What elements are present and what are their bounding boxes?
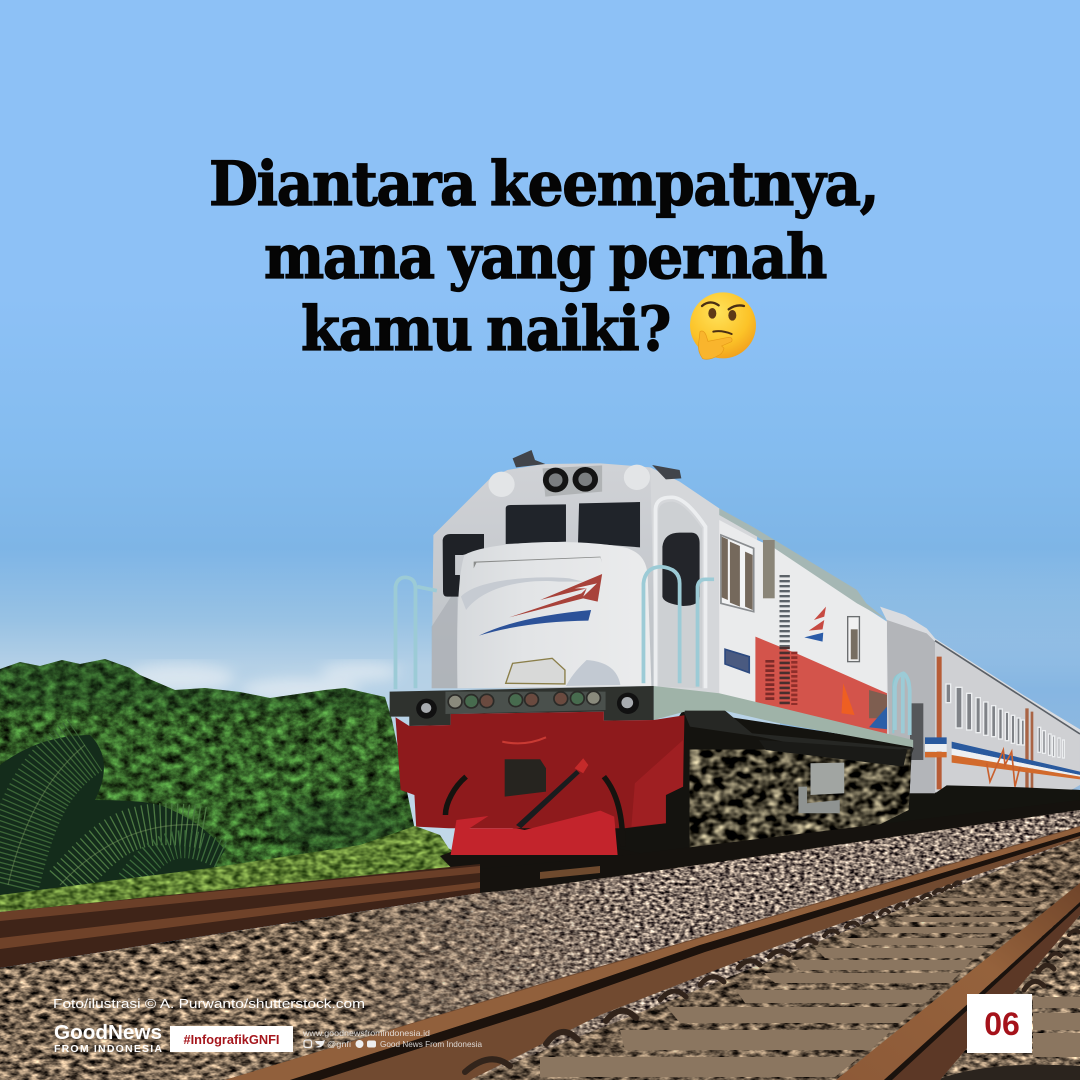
cab front windows xyxy=(506,504,566,544)
locomotive xyxy=(390,450,914,857)
nose hood xyxy=(457,542,651,688)
clouds on horizon xyxy=(125,663,400,702)
nose hatch xyxy=(506,658,565,684)
side deck xyxy=(654,686,913,747)
icon: facebook xyxy=(356,1040,364,1048)
front bumper bar xyxy=(390,686,654,726)
sleepers between rails xyxy=(460,830,1080,1080)
social links: @gnfi xyxy=(327,1039,351,1049)
lower red plate xyxy=(451,811,618,855)
title: kamu naiki? xyxy=(301,294,670,365)
marker lights xyxy=(448,691,600,708)
title xyxy=(209,149,878,365)
red lower panel xyxy=(755,637,887,738)
carriage body xyxy=(887,620,1080,793)
roof strip xyxy=(719,508,887,620)
carriage underframe xyxy=(887,785,1080,830)
cab front xyxy=(432,463,659,688)
icon: instagram xyxy=(304,1040,312,1048)
carriage roof xyxy=(880,607,1080,737)
treeline xyxy=(0,659,452,868)
battery box xyxy=(810,763,844,795)
photo credit: Foto/ilustrasi © A. Purwanto/shutterstock.com xyxy=(53,996,365,1011)
cab door frame xyxy=(656,497,705,688)
roof discs xyxy=(488,472,515,497)
coupler xyxy=(505,759,546,797)
side window xyxy=(721,535,754,612)
red pilot xyxy=(395,712,684,828)
nose logo xyxy=(509,574,602,617)
carriages xyxy=(880,607,1080,830)
long hood xyxy=(719,520,887,738)
page number badge xyxy=(967,994,1032,1053)
palm fronds xyxy=(0,735,225,897)
shadow behind train xyxy=(440,780,1080,898)
far track rails xyxy=(0,864,480,968)
horns xyxy=(513,450,681,479)
social links xyxy=(302,1028,482,1049)
far track xyxy=(0,800,1080,968)
logo: GoodNews from Indonesia xyxy=(54,1022,162,1055)
front lamps xyxy=(416,699,437,719)
ballast xyxy=(0,800,1080,1080)
shadow under train xyxy=(470,800,1080,898)
social links: Good News From Indonesia xyxy=(380,1039,482,1049)
hashtag badge xyxy=(170,1026,293,1052)
logo: GoodNews from Indonesia: FROM INDONESIA xyxy=(54,1043,162,1055)
carriage windows xyxy=(946,684,1064,758)
carriage end wall xyxy=(887,620,935,793)
side small window xyxy=(848,617,859,662)
page number badge: 06 xyxy=(984,1006,1020,1042)
vents xyxy=(763,540,775,598)
cab side xyxy=(650,467,757,703)
number plate xyxy=(725,649,749,673)
handrails xyxy=(395,567,910,735)
icon: twitter xyxy=(315,1040,325,1048)
grass verge xyxy=(0,826,451,912)
right ballast and sleepers xyxy=(940,915,1080,1080)
logo: GoodNews from Indonesia: GoodNews xyxy=(54,1022,162,1044)
chains xyxy=(445,777,623,847)
doors and stripes xyxy=(937,657,942,789)
near left rail xyxy=(225,826,1080,1080)
title: mana yang pernah xyxy=(264,222,826,293)
side logo xyxy=(809,607,826,631)
cab side window xyxy=(662,533,700,606)
icon: youtube xyxy=(367,1040,376,1048)
near right rail xyxy=(836,883,1080,1080)
icon: thinking face emoji xyxy=(690,292,756,359)
underframe and bogies xyxy=(679,710,914,848)
rail clips xyxy=(465,882,1079,1072)
title: Diantara keempatnya, xyxy=(209,149,878,220)
headlights housing xyxy=(543,465,602,497)
hashtag badge: #InfografikGNFI xyxy=(184,1032,280,1047)
social links: www.goodnewsfromindonesia.id xyxy=(302,1028,430,1038)
